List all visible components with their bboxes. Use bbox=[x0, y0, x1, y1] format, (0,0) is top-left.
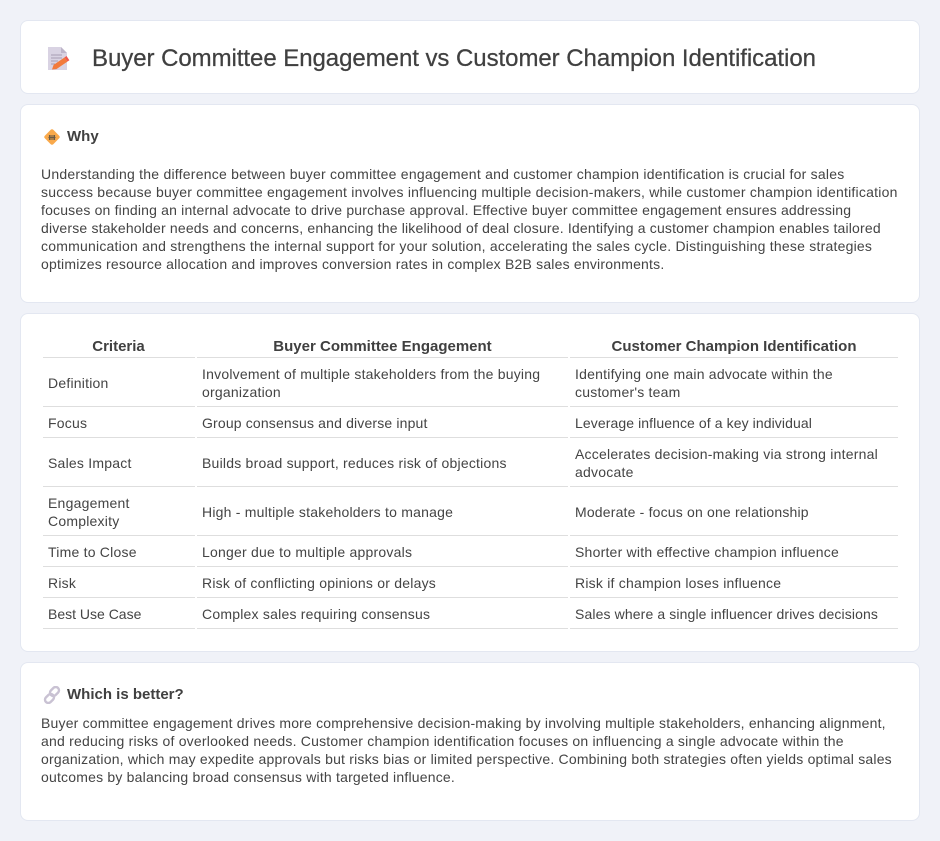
cell: definition champion: Identifying one main advocate within the bbox=[575, 366, 833, 382]
panel: why bbox=[20, 104, 920, 303]
table header: criteria: Criteria bbox=[92, 338, 145, 355]
cell: definition buyer bbox=[202, 366, 540, 400]
cell: complexity buyer: High - multiple stakeholders to manage bbox=[202, 504, 453, 520]
text block: which is better: and reducing risks of overlooked needs. Customer champion identification focuses on influencing a single advocate within the bbox=[41, 733, 844, 749]
row: engagement complexity: Complexity bbox=[48, 513, 119, 529]
row: engagement complexity bbox=[48, 495, 130, 529]
row: best use case: Best Use Case bbox=[48, 606, 141, 622]
cell: use case buyer: Complex sales requiring consensus bbox=[202, 606, 430, 622]
text block: why bbox=[41, 166, 898, 272]
icon: diamond sign bbox=[44, 129, 60, 145]
text block: why: focuses on finding an internal advocate to drive purchase approval. Effective buyer committee engagement ensures addressing bbox=[41, 202, 851, 218]
cell: time champion: Shorter with effective champion influence bbox=[575, 544, 839, 560]
text block: why: optimizes resource allocation and improves conversion rates in complex B2B sales environments. bbox=[41, 256, 664, 272]
icon: document with pencil bbox=[48, 47, 70, 70]
row: risk: Risk bbox=[48, 575, 76, 591]
cell: definition champion: customer's team bbox=[575, 384, 681, 400]
cell: definition champion bbox=[575, 366, 833, 400]
icon: chain link bbox=[44, 686, 60, 704]
row: sales impact: Sales Impact bbox=[48, 455, 132, 471]
text block: why: Understanding the difference between buyer committee engagement and customer champion identification is crucial for sales bbox=[41, 166, 844, 182]
heading: which is better: Which is better? bbox=[67, 686, 184, 703]
cell: focus buyer: Group consensus and diverse input bbox=[202, 415, 428, 431]
text block: why: success because buyer committee engagement involves influencing multiple decision-makers, while customer champion identification bbox=[41, 184, 898, 200]
text block: which is better bbox=[41, 715, 892, 785]
cell: time buyer: Longer due to multiple approvals bbox=[202, 544, 412, 560]
cell: focus champion: Leverage influence of a key individual bbox=[575, 415, 812, 431]
heading: why: Why bbox=[67, 128, 99, 145]
cell: risk buyer: Risk of conflicting opinions or delays bbox=[202, 575, 436, 591]
text block: why: communication and strengthens the internal support for your solution, accelerating the sales cycle. Distinguishing these strategies bbox=[41, 238, 872, 254]
text block: which is better: Buyer committee engagement drives more comprehensive decision-making by involving multiple stakeholders, enhancing alignment, bbox=[41, 715, 886, 731]
cell: definition buyer: Involvement of multiple stakeholders from the buying bbox=[202, 366, 540, 382]
cell: risk champion: Risk if champion loses influence bbox=[575, 575, 781, 591]
row: definition: Definition bbox=[48, 375, 109, 391]
text block: why: diverse stakeholder needs and concerns, enhancing the likelihood of deal closure. Identifying a customer champion enables tailored bbox=[41, 220, 881, 236]
row: focus: Focus bbox=[48, 415, 87, 431]
row: time to close: Time to Close bbox=[48, 544, 137, 560]
cell: sales impact champion: advocate bbox=[575, 464, 634, 480]
cell: sales impact buyer: Builds broad support, reduces risk of objections bbox=[202, 455, 507, 471]
cell: use case champion: Sales where a single influencer drives decisions bbox=[575, 606, 878, 622]
cell: definition buyer: organization bbox=[202, 384, 281, 400]
panel: which is better bbox=[20, 662, 920, 821]
text block: which is better: outcomes by balancing broad consensus with targeted influence. bbox=[41, 769, 455, 785]
cell: sales impact champion: Accelerates decision-making via strong internal bbox=[575, 446, 878, 462]
panel: title header bbox=[20, 20, 920, 94]
row: engagement complexity: Engagement bbox=[48, 495, 130, 511]
table header: buyer committee engagement: Buyer Committee Engagement bbox=[273, 338, 492, 355]
cell: complexity champion: Moderate - focus on one relationship bbox=[575, 504, 809, 520]
cell: sales impact champion bbox=[575, 446, 878, 480]
panel: comparison table bbox=[20, 313, 920, 652]
title: Buyer Committee Engagement vs Customer Champion Identification bbox=[92, 45, 816, 72]
text block: which is better: organization, which may expedite approvals but risks bias or limited perspective. Combining both strategies often yields optimal sales bbox=[41, 751, 892, 767]
table header: customer champion identification: Customer Champion Identification bbox=[611, 338, 856, 355]
